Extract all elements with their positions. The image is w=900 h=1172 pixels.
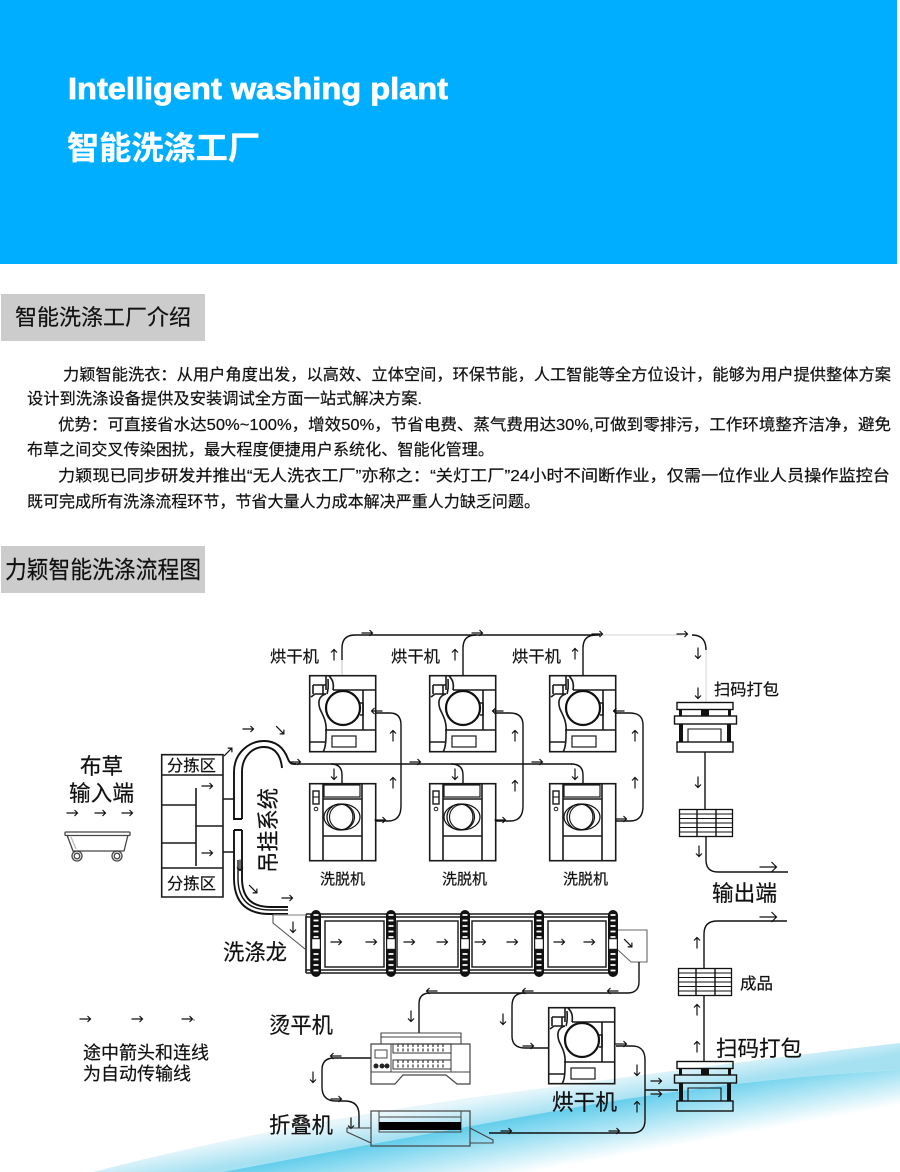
legend text: 为自动传输线 (83, 1060, 191, 1086)
input station: linen cart (65, 749, 134, 861)
tunnel rings (311, 910, 618, 977)
legend arrows (80, 1016, 195, 1022)
dryer label 1: 烘干机 (270, 643, 319, 667)
title: english: Intelligent washing plant (68, 71, 448, 106)
label: finished goods: 成品 (740, 970, 773, 994)
dryer 2 (429, 675, 496, 752)
section heading: flow chart (1, 546, 205, 593)
label: ironer: 烫平机 (269, 1008, 333, 1040)
dryer 3 (549, 675, 616, 752)
label: washing tunnel: 洗涤龙 (223, 935, 287, 967)
section heading: introduction: 智能洗涤工厂介绍 (15, 300, 191, 332)
intro text block (27, 366, 891, 511)
label: hanging system: 吊挂系统 (251, 788, 283, 873)
discharge chute (618, 930, 647, 962)
dryer 1 (309, 675, 376, 752)
washing tunnel (223, 910, 647, 977)
bottom right: packing and finished goods (674, 968, 802, 1111)
icon: stack bottom (678, 968, 732, 996)
ironer rollers (393, 1044, 451, 1069)
section heading: introduction (1, 294, 205, 341)
washer label 3: 洗脱机 (563, 868, 608, 889)
legend (80, 1016, 209, 1086)
top right: packing to output (674, 676, 788, 922)
legend text: 途中箭头和连线 (83, 1039, 209, 1065)
folding machine (269, 1108, 493, 1146)
sorting area (162, 746, 234, 897)
label: scan and pack top: 扫码打包 (714, 676, 779, 700)
label: linen input: 布草 (80, 749, 123, 781)
intro text block: 优势：可直接省水达50%~100%，增效50%，节省电费、蒸气费用达30%,可做到零排污，工作环境整齐洁净，避免 (58, 415, 891, 434)
rail arrows (237, 724, 300, 901)
title: chinese: 智能洗涤工厂 (67, 123, 260, 169)
ironing machine (269, 1008, 470, 1084)
dryer label 3: 烘干机 (512, 643, 561, 667)
intro text block: 力颖智能洗衣：从用户角度出发，以高效、立体空间，环保节能，人工智能等全方位设计，能够为用户提供整体方案 (63, 366, 891, 384)
washer label 2: 洗脱机 (442, 868, 487, 889)
icon: packer top (674, 702, 736, 752)
label: output end: 输出端 (712, 876, 777, 908)
washer label 1: 洗脱机 (320, 868, 365, 889)
section heading: flow chart: 力颖智能洗涤流程图 (5, 550, 201, 585)
label: linen input (69, 749, 134, 808)
tunnel arrows (290, 922, 634, 949)
output line (705, 752, 788, 872)
washer 3 (550, 783, 616, 861)
label: dryer center: 烘干机 (552, 1085, 617, 1117)
conveyor lines: upper section (296, 635, 706, 821)
legend text (83, 1039, 209, 1086)
dryer label 2: 烘干机 (391, 643, 440, 667)
tunnel windows (325, 921, 606, 967)
arrows above cart (66, 810, 132, 816)
icon: stack top (679, 809, 733, 837)
header banner (0, 0, 897, 264)
label: sorting area top: 分拣区 (167, 752, 216, 776)
intro text block: 布草之间交叉传染困扰，最大程度便捷用户系统化、智能化管理。 (27, 441, 494, 459)
arrows: output (695, 776, 776, 922)
conveyor lines: lower section (322, 921, 787, 1133)
icon: cart (65, 832, 130, 861)
arrows: dryer and washer flow (331, 630, 701, 823)
label: folder: 折叠机 (269, 1108, 333, 1140)
icon: packer bottom (674, 1062, 736, 1111)
intro text block: 力颖现已同步研发并推出“无人洗衣工厂”亦称之：“关灯工厂”24小时不间断作业，仅需一位作业人员操作监控台 (58, 467, 890, 485)
hanging system rail (234, 724, 300, 914)
sorting arrows (202, 746, 234, 856)
washer row (310, 783, 616, 889)
intro text block: 设计到洗涤设备提供及安装调试全方面一站式解决方案. (27, 390, 422, 408)
background wave (93, 1043, 900, 1172)
arrows: lower section (310, 938, 700, 1134)
label: linen input: 输入端 (69, 776, 134, 808)
center dryer (548, 1007, 617, 1117)
washer 1 (310, 783, 376, 861)
label: sorting area bottom: 分拣区 (167, 870, 216, 894)
top row dryers (270, 643, 616, 752)
label: scan and pack bottom: 扫码打包 (716, 1032, 802, 1063)
intro text block: 既可完成所有洗涤流程环节，节省大量人力成本解决严重人力缺乏问题。 (27, 493, 540, 511)
washer 2 (430, 783, 496, 861)
